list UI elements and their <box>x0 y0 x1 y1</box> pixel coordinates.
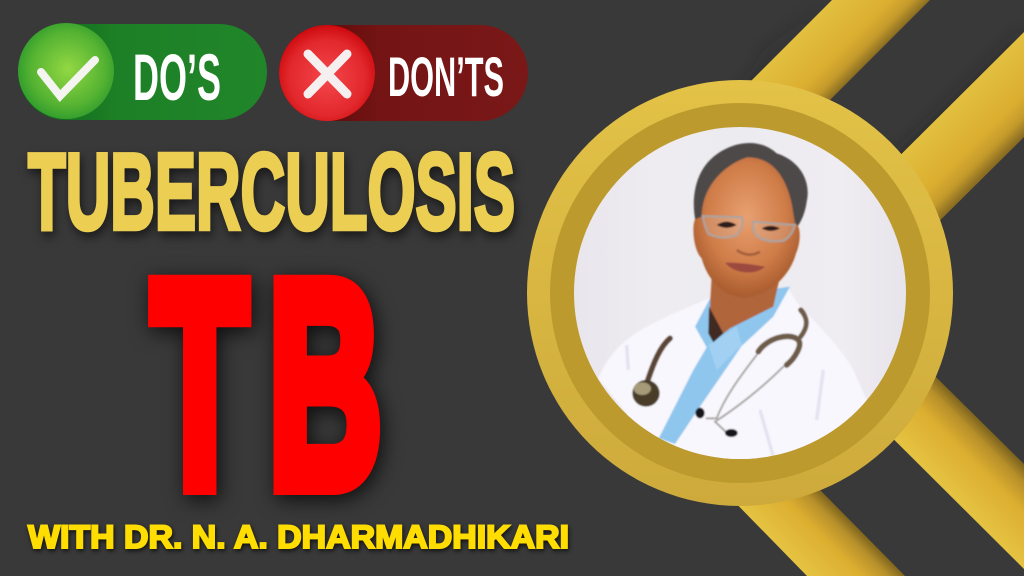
label: don'ts: DON’TS <box>388 45 504 108</box>
blue shirt <box>659 287 790 444</box>
toggle: do's <box>18 23 267 120</box>
toggle: don'ts <box>279 25 528 121</box>
white coat <box>598 287 867 463</box>
neck <box>709 278 780 336</box>
title: tuberculosis: TUBERCULOSIS <box>28 131 515 253</box>
eyes, nose and smile <box>717 222 780 272</box>
portrait ring <box>527 80 953 506</box>
icon: cross knob <box>279 25 375 121</box>
head <box>693 157 800 297</box>
big heading: TB: T <box>152 221 248 547</box>
label: do's: DO’S <box>133 40 221 114</box>
big heading: TB <box>152 221 382 547</box>
icon: check mark knob <box>18 23 114 119</box>
stethoscope <box>632 310 806 437</box>
decorative gold stripes <box>680 0 1024 576</box>
presenter credit: WITH DR. N. A. DHARMADHIKARI <box>28 519 569 555</box>
big heading: TB: B <box>268 221 382 547</box>
glasses <box>703 216 795 241</box>
hair <box>694 143 808 230</box>
portrait of the doctor <box>570 123 910 463</box>
